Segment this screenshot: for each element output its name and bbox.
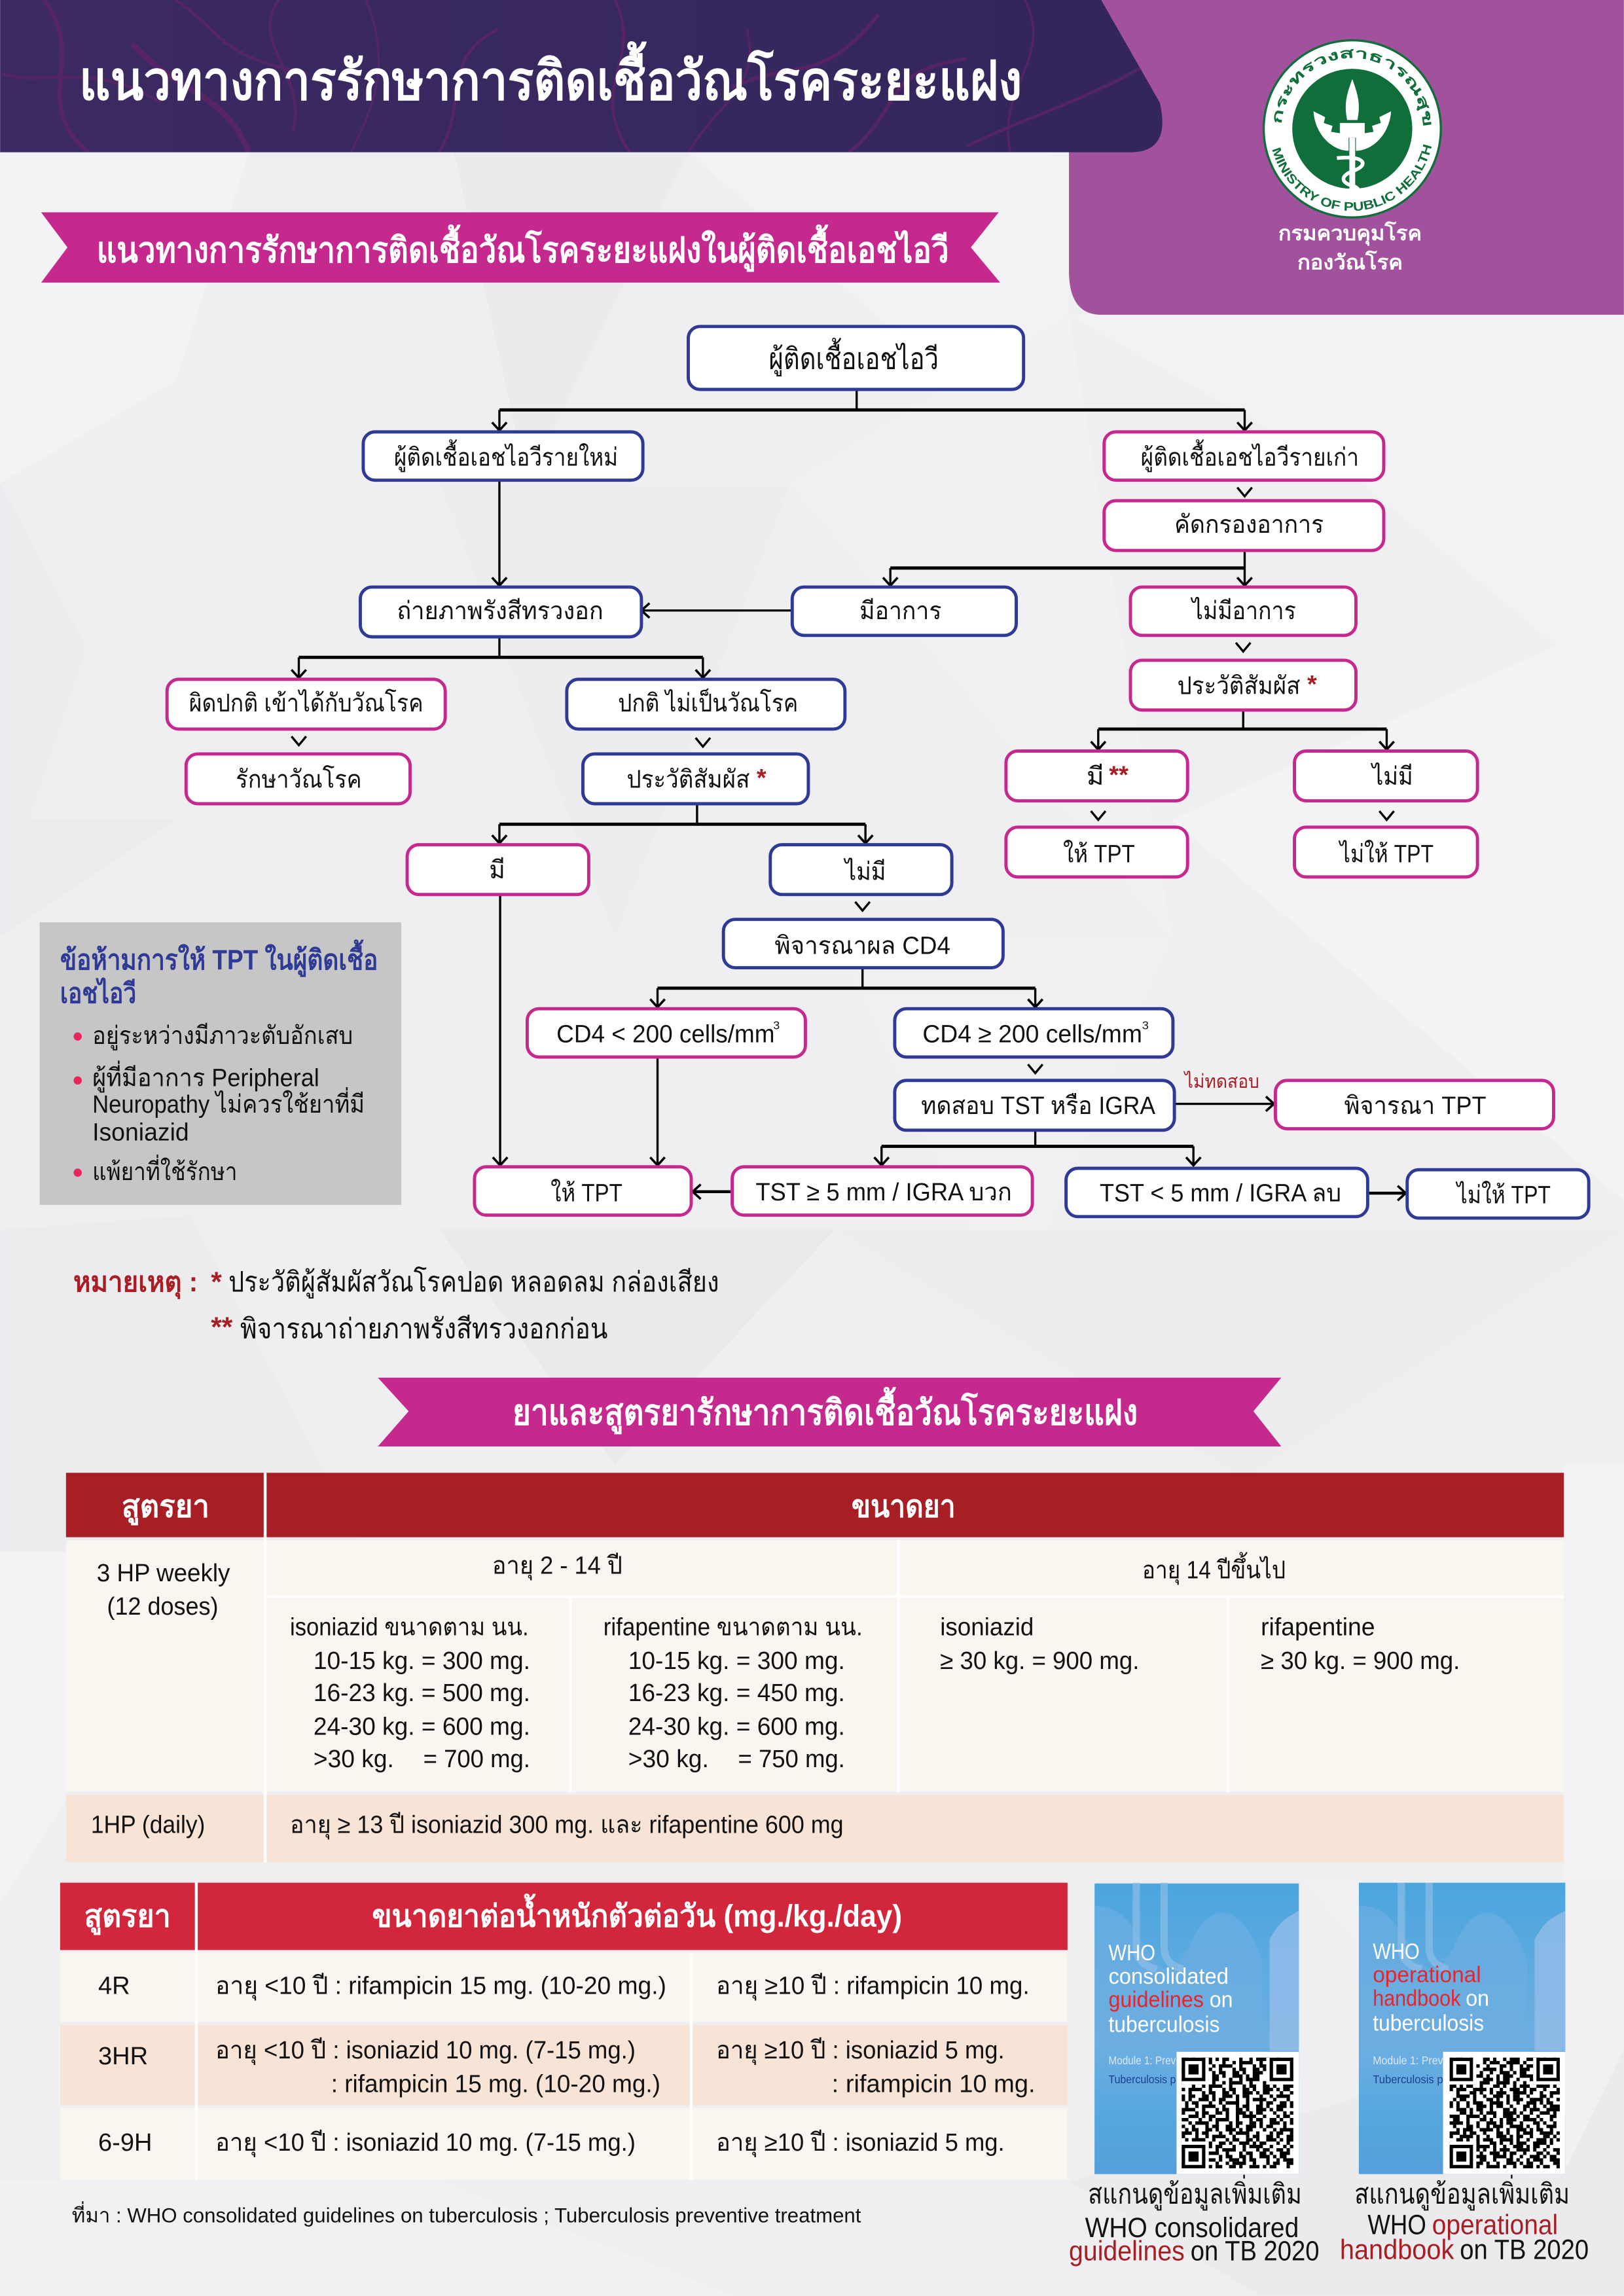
- contraindications list: ผู้ที่มีอาการ Peripheral: [92, 1060, 319, 1093]
- node: give TPT right: [1006, 827, 1187, 877]
- node: existing HIV patients: ผู้ติดเชื้อเอชไอวีรายเก่า: [1141, 439, 1359, 472]
- logo caption: กรมควบคุมโรค: [1278, 221, 1422, 246]
- node: TST negative: TST < 5 mm / IGRA ลบ: [1100, 1179, 1341, 1207]
- contraindications heading: [60, 939, 378, 1009]
- row: 3 HP weekly: 3 HP weekly: [97, 1560, 230, 1587]
- section ribbon: HIV guideline heading: แนวทางการรักษาการติดเชื้อวัณโรคระยะแฝงในผู้ติดเชื้อเอชไอวี: [97, 224, 949, 272]
- rifapentine dose by weight: = 750 mg.: [738, 1746, 845, 1773]
- notes: หมายเหตุ :: [73, 1267, 198, 1299]
- section ribbon: HIV guideline heading: [41, 212, 1000, 283]
- node: abnormal consistent with TB: ผิดปกติ เข้าได้กับวัณโรค: [189, 689, 424, 717]
- node: normal not TB: [567, 679, 845, 729]
- caption: operational handbook: on TB 2020: [1460, 2234, 1589, 2265]
- node: no left: ไม่มี: [843, 857, 886, 886]
- node: TST positive: [732, 1167, 1032, 1215]
- logo: Ministry of Public Health seal: MINISTRY OF PUBLIC HEALTH: [1272, 144, 1432, 211]
- book cover: WHO operational handbook: WHO: [1373, 1939, 1420, 1964]
- row: 4R: [98, 1973, 1030, 2001]
- node: consider TPT: พิจารณา TPT: [1344, 1092, 1487, 1120]
- node: yes double asterisk: **: [1109, 762, 1128, 789]
- caption: consolidated guidelines: [1069, 2174, 1320, 2267]
- row: 3 HP weekly: [97, 1551, 1286, 1621]
- row: 4R: อายุ ≥10 ปี : rifampicin 10 mg.: [716, 1973, 1030, 2001]
- node: give TPT bottom: ให้ TPT: [550, 1179, 623, 1207]
- rifapentine dose by weight: rifapentine ขนาดตาม นน.: [604, 1614, 863, 1641]
- rifapentine dose by weight: 24-30 kg. = 600 mg.: [628, 1713, 845, 1741]
- row: 3HR: อายุ <10 ปี : isoniazid 10 mg. (7-15 mg.): [215, 2037, 636, 2065]
- notes: *: [211, 1267, 222, 1298]
- row: 3HR: อายุ ≥10 ปี : isoniazid 5 mg.: [716, 2037, 1005, 2065]
- purple logo panel: [1069, 0, 1624, 315]
- contraindications list: อยู่ระหว่างมีภาวะตับอักเสบ: [92, 1022, 353, 1050]
- row: 1HP daily: 1HP (daily): [91, 1811, 205, 1839]
- table header: ขนาดยา: [852, 1488, 956, 1523]
- rifapentine dose by weight: 10-15 kg. = 300 mg.: [628, 1647, 845, 1675]
- isoniazid dose by weight: 10-15 kg. = 300 mg.: [314, 1647, 530, 1675]
- logo caption: กองวัณโรค: [1297, 250, 1403, 274]
- table: 3HP and 1HP regimens: [66, 1473, 1564, 1862]
- notes: พิจารณาถ่ายภาพรังสีทรวงอกก่อน: [240, 1314, 607, 1344]
- row: 1HP daily: [91, 1811, 844, 1839]
- contraindications list: Isoniazid: [92, 1119, 189, 1146]
- source line: ที่มา : WHO consolidated guidelines on tuberculosis ; Tuberculosis preventive treatment: [72, 2200, 861, 2227]
- isoniazid dose by weight: >30 kg.: [314, 1746, 394, 1773]
- panel: TPT contraindications: [40, 922, 401, 1205]
- node: CD4 at least 200: 3: [1142, 1018, 1149, 1031]
- contraindications list: แพ้ยาที่ใช้รักษา: [92, 1154, 238, 1186]
- node: contact history left: [583, 754, 808, 804]
- node: yes left: มี: [489, 857, 505, 884]
- book cover: WHO operational handbook: Tuberculosis p: [1373, 2073, 1443, 2086]
- caption: operational handbook: [1340, 2174, 1589, 2265]
- node: symptomatic: มีอาการ: [859, 598, 941, 625]
- node: yes left: [407, 845, 588, 895]
- notes: **: [211, 1312, 233, 1343]
- caption: operational handbook: สแกนดูข้อมูลเพิ่มเติม: [1354, 2174, 1570, 2211]
- header banner with title: [0, 0, 1163, 152]
- node: symptom screening: [1104, 501, 1384, 550]
- isoniazid dose by weight: isoniazid ขนาดตาม นน.: [290, 1614, 529, 1641]
- row: 6-9H: อายุ <10 ปี : isoniazid 10 mg. (7-15 mg.): [215, 2129, 636, 2157]
- node: no right: [1295, 751, 1477, 801]
- book cover: WHO operational handbook: [1359, 1883, 1565, 2174]
- table header: [84, 1893, 902, 1936]
- node: normal not TB: ปกติ ไม่เป็นวัณโรค: [618, 688, 798, 717]
- node: no TPT bottom: ไม่ให้ TPT: [1455, 1181, 1551, 1210]
- book cover: WHO consolidated guidelines: WHO: [1108, 1941, 1155, 1965]
- adult doses: ≥ 30 kg. = 900 mg.: [940, 1647, 1139, 1675]
- book cover: WHO consolidated guidelines: Tuberculosis p: [1108, 2073, 1176, 2086]
- adult doses: rifapentine: [1261, 1614, 1375, 1641]
- book cover: WHO consolidated guidelines: [1094, 1883, 1299, 2174]
- node: new HIV patients: [363, 432, 643, 480]
- node: contact history right: ประวัติสัมผัส: [1178, 672, 1300, 700]
- label: not tested: ไม่ทดสอบ: [1183, 1070, 1259, 1092]
- table header: ขนาดยาต่อน้ำหนักตัวต่อวัน (mg./kg./day): [372, 1893, 902, 1933]
- node: TST negative: [1066, 1168, 1367, 1217]
- row: 4R: อายุ <10 ปี : rifampicin 15 mg. (10-20 mg.): [215, 1973, 666, 2001]
- node: yes double asterisk: มี: [1087, 763, 1104, 791]
- isoniazid dose by weight: = 700 mg.: [424, 1746, 530, 1773]
- node: TST or IGRA test: ทดสอบ TST หรือ IGRA: [921, 1092, 1156, 1120]
- adult doses: isoniazid: [940, 1614, 1034, 1641]
- row: 6-9H: 6-9H: [98, 2129, 152, 2157]
- caption: consolidated guidelines: WHO consolidared: [1085, 2213, 1299, 2244]
- caption: consolidated guidelines: สแกนดูข้อมูลเพิ่มเติม: [1088, 2174, 1302, 2211]
- node: new HIV patients: ผู้ติดเชื้อเอชไอวีรายใหม่: [394, 439, 618, 472]
- node: contact history left: ประวัติสัมผัส: [627, 766, 749, 793]
- node: chest x-ray: [360, 587, 641, 637]
- section ribbon: drugs and regimens heading: ยาและสูตรยารักษาการติดเชื้อวัณโรคระยะแฝง: [513, 1386, 1138, 1434]
- row: 3HR: : rifampicin 10 mg.: [832, 2070, 1036, 2098]
- book cover: WHO consolidated guidelines: Module 1: Prev: [1108, 2054, 1176, 2067]
- node: treat TB: [186, 754, 410, 804]
- node: contact history right: [1130, 660, 1356, 710]
- node: treat TB: รักษาวัณโรค: [236, 764, 362, 793]
- node: no TPT right: [1295, 827, 1477, 877]
- node: give TPT bottom: [475, 1167, 691, 1215]
- row: 3HR: 3HR: [98, 2043, 148, 2070]
- book cover: WHO consolidated guidelines: guidelines: [1108, 1988, 1204, 2013]
- contraindications heading: เอชไอวี: [60, 977, 136, 1009]
- section ribbon: drugs and regimens heading: [378, 1378, 1281, 1446]
- table header: [122, 1488, 956, 1526]
- table: dose per body weight: [60, 1883, 1068, 2180]
- row: 6-9H: อายุ ≥10 ปี : isoniazid 5 mg.: [716, 2129, 1005, 2157]
- isoniazid dose by weight: 16-23 kg. = 500 mg.: [314, 1679, 530, 1707]
- book cover: WHO operational handbook: tuberculosis: [1373, 2011, 1484, 2036]
- node: consider CD4: พิจารณาผล CD4: [774, 932, 950, 960]
- contraindications list: [73, 1022, 365, 1186]
- logo: Ministry of Public Health seal: กระทรวงสาธารณสุข: [1274, 48, 1432, 126]
- caption: operational handbook: handbook: [1340, 2234, 1454, 2265]
- node: symptom screening: คัดกรองอาการ: [1174, 511, 1324, 539]
- node: HIV patients: ผู้ติดเชื้อเอชไอวี: [769, 338, 939, 377]
- book cover: WHO operational handbook: operational: [1373, 1963, 1481, 1988]
- node: HIV patients: [688, 327, 1024, 389]
- node: no right: ไม่มี: [1370, 762, 1413, 791]
- node: yes double asterisk: [1006, 751, 1187, 801]
- notes: [73, 1266, 719, 1344]
- title: แนวทางการรักษาการติดเชื้อวัณโรคระยะแฝง: [79, 41, 1022, 111]
- book cover: WHO operational handbook: Module 1: Prev: [1373, 2054, 1443, 2067]
- table header: สูตรยา: [122, 1488, 209, 1526]
- node: CD4 at least 200: CD4 ≥ 200 cells/mm: [922, 1021, 1142, 1049]
- isoniazid dose by weight: 24-30 kg. = 600 mg.: [314, 1713, 530, 1741]
- row: 3 HP weekly: (12 doses): [107, 1593, 218, 1621]
- node: consider TPT: [1275, 1081, 1553, 1129]
- contraindications list: Neuropathy ไม่ควรใช้ยาที่มี: [92, 1086, 365, 1119]
- QR code: [1443, 2052, 1565, 2174]
- node: give TPT right: ให้ TPT: [1063, 840, 1135, 868]
- node: no symptoms: [1130, 587, 1356, 636]
- node: contact history left: *: [757, 764, 767, 792]
- notes: ประวัติผู้สัมผัสวัณโรคปอด หลอดลม กล่องเสียง: [228, 1266, 719, 1299]
- isoniazid dose by weight: [290, 1614, 530, 1773]
- node: no TPT right: ไม่ให้ TPT: [1338, 839, 1434, 868]
- row: 6-9H: [98, 2129, 1005, 2157]
- book cover: WHO consolidated guidelines: tuberculosis: [1108, 2013, 1219, 2037]
- row: 3HR: [98, 2037, 1036, 2098]
- node: CD4 below 200: 3: [773, 1018, 780, 1031]
- row: 1HP daily: อายุ ≥ 13 ปี isoniazid 300 mg. และ rifapentine 600 mg: [290, 1811, 844, 1839]
- caption: consolidated guidelines: guidelines: [1069, 2236, 1185, 2267]
- node: CD4 below 200: [527, 1009, 805, 1057]
- node: no TPT bottom: [1407, 1170, 1589, 1218]
- contraindications heading: ข้อห้ามการให้ TPT ในผู้ติดเชื้อ: [60, 939, 378, 977]
- row: 3HR: : rifampicin 15 mg. (10-20 mg.): [331, 2070, 660, 2098]
- node: TST or IGRA test: [895, 1081, 1174, 1130]
- QR code: [1176, 2052, 1299, 2174]
- logo: Ministry of Public Health seal: [1262, 39, 1442, 219]
- logo caption: [1278, 221, 1422, 274]
- book cover: WHO operational handbook: handbook: [1373, 1986, 1461, 2011]
- node: chest x-ray: ถ่ายภาพรังสีทรวงอก: [397, 598, 604, 625]
- caption: consolidated guidelines: on TB 2020: [1191, 2236, 1320, 2267]
- node: TST positive: TST ≥ 5 mm / IGRA บวก: [755, 1179, 1012, 1206]
- node: symptomatic: [792, 587, 1017, 636]
- caption: operational handbook: operational: [1432, 2210, 1558, 2240]
- rifapentine dose by weight: >30 kg.: [628, 1746, 709, 1773]
- node: contact history right: *: [1307, 671, 1317, 698]
- node: CD4 below 200: CD4 < 200 cells/mm: [556, 1021, 774, 1049]
- node: no left: [770, 845, 952, 895]
- row: 3 HP weekly: อายุ 14 ปีขึ้นไป: [1142, 1551, 1286, 1585]
- node: abnormal consistent with TB: [167, 679, 445, 729]
- table header: สูตรยา: [84, 1899, 171, 1936]
- node: existing HIV patients: [1104, 432, 1384, 480]
- book cover: WHO operational handbook: on: [1466, 1986, 1489, 2011]
- row: 3 HP weekly: อายุ 2 - 14 ปี: [492, 1552, 623, 1581]
- book cover: WHO consolidated guidelines: on: [1210, 1988, 1233, 2013]
- adult doses: ≥ 30 kg. = 900 mg.: [1261, 1647, 1460, 1675]
- adult doses: [940, 1614, 1460, 1675]
- caption: operational handbook: WHO: [1367, 2210, 1426, 2240]
- rifapentine dose by weight: [604, 1614, 863, 1773]
- icon: winged caduceus: [1314, 79, 1391, 196]
- rifapentine dose by weight: 16-23 kg. = 450 mg.: [628, 1679, 845, 1707]
- node: consider CD4: [723, 920, 1003, 968]
- node: no symptoms: ไม่มีอาการ: [1190, 596, 1296, 625]
- row: 4R: 4R: [98, 1973, 130, 2000]
- book cover: WHO consolidated guidelines: consolidated: [1108, 1964, 1229, 1989]
- flowchart connectors: [291, 389, 1406, 1193]
- node: CD4 at least 200: [895, 1009, 1173, 1057]
